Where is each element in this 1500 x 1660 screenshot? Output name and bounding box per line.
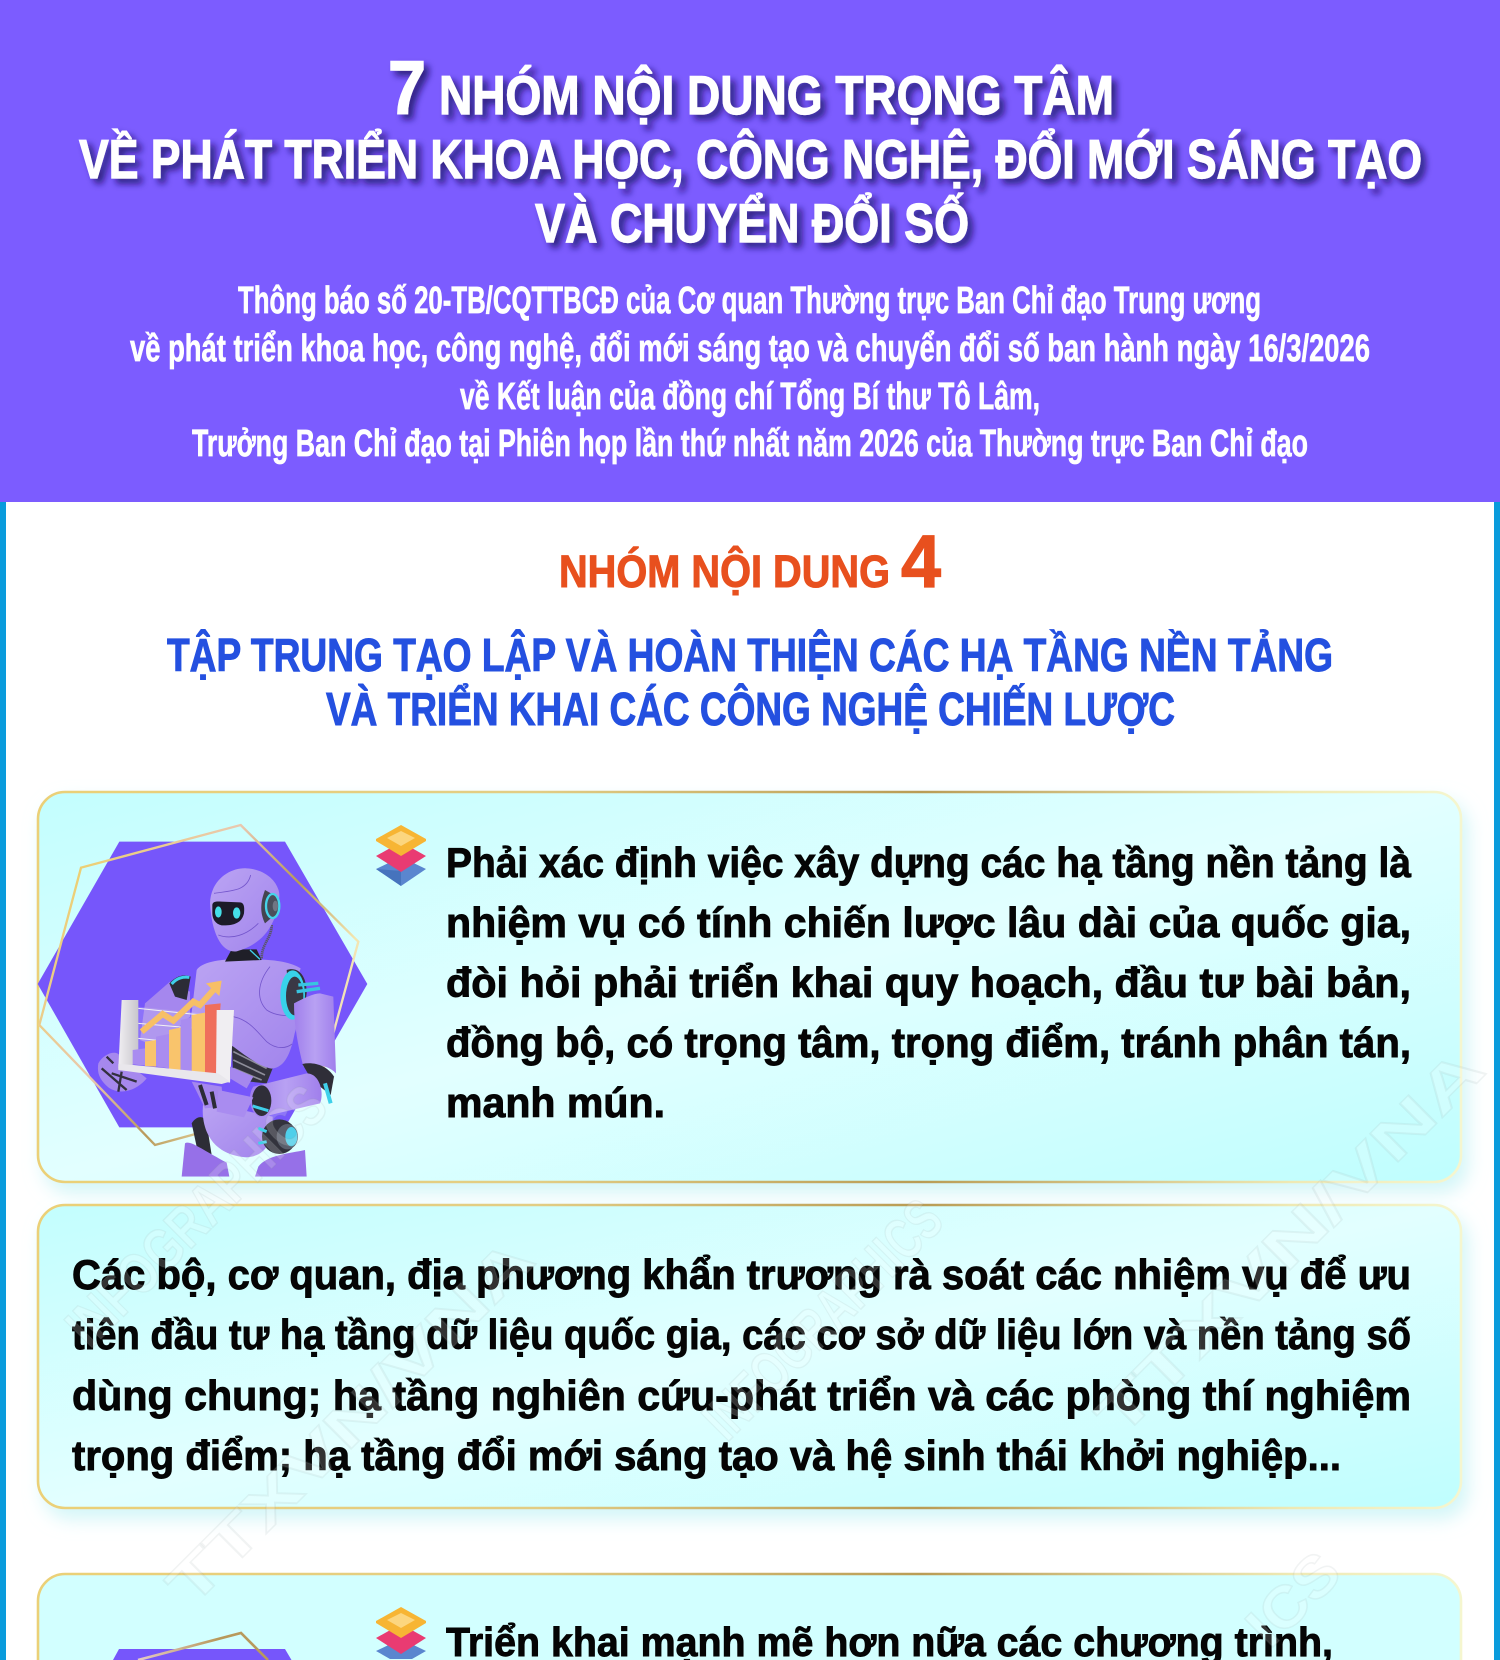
header banner: [0, 0, 1500, 502]
main title: VÀ CHUYỂN ĐỔI SỐ: [535, 192, 969, 254]
section label: group 4: NHÓM NỘI DUNG: [559, 546, 890, 597]
gold frame: [39, 825, 358, 1145]
panel: card 1: [38, 792, 1461, 1182]
subtitle: [130, 280, 1370, 465]
card 1 text: đòi hỏi phải triển khai quy hoạch, đầu tư bài bản,: [446, 959, 1411, 1006]
watermark: [53, 1036, 1497, 1659]
right side border: [1494, 500, 1500, 1660]
icon: stacked layers, cropped: [376, 1607, 426, 1659]
section label: group 4: 4: [901, 520, 941, 603]
section heading: VÀ TRIỂN KHAI CÁC CÔNG NGHỆ CHIẾN LƯỢC: [326, 683, 1175, 735]
section label: group 4: [559, 520, 941, 603]
watermark: INFOGRAPHICS: [690, 1187, 955, 1452]
watermark: TTXVN/VNA: [1083, 1036, 1497, 1449]
card 2 text: Các bộ, cơ quan, địa phương khẩn trương rà soát các nhiệm vụ để ưu: [72, 1251, 1411, 1298]
panel: card 3: [38, 1574, 1461, 1660]
watermark: INFOGRAPHICS: [53, 1073, 340, 1359]
card 1 text: Phải xác định việc xây dựng các hạ tầng nền tảng là: [446, 839, 1412, 886]
hexagon backdrop, cropped: [113, 1649, 292, 1660]
card 1 text: đồng bộ, có trọng tâm, trọng điểm, tránh phân tán,: [446, 1019, 1411, 1066]
robot: [98, 868, 336, 1177]
subtitle: về Kết luận của đồng chí Tổng Bí thư Tô Lâm,: [460, 376, 1040, 418]
card 2 text: trọng điểm; hạ tầng đổi mới sáng tạo và hệ sinh thái khởi nghiệp...: [72, 1432, 1341, 1479]
card 1 text: [446, 839, 1412, 1126]
watermark: ICS: [1233, 1539, 1353, 1659]
section heading: [167, 629, 1333, 735]
card 1 text: nhiệm vụ có tính chiến lược lâu dài của quốc gia,: [446, 899, 1411, 946]
left side border: [0, 500, 6, 1660]
hexagon backdrop: [38, 842, 367, 1127]
card 1 text: manh mún.: [446, 1079, 665, 1126]
icon: stacked layers: [376, 825, 426, 886]
gold frame, cropped: [138, 1633, 268, 1660]
watermark: TTXVN/VNA: [154, 1226, 547, 1618]
panel: card 2: [38, 1205, 1461, 1508]
main title: 7: [388, 46, 426, 131]
illustration: robot with chart: [38, 825, 367, 1177]
card 2 text: [72, 1251, 1411, 1479]
main title: NHÓM NỘI DUNG TRỌNG TÂM: [439, 64, 1114, 126]
card 2 text: dùng chung; hạ tầng nghiên cứu-phát triển và các phòng thí nghiệm: [72, 1372, 1411, 1419]
main title: [79, 46, 1422, 254]
